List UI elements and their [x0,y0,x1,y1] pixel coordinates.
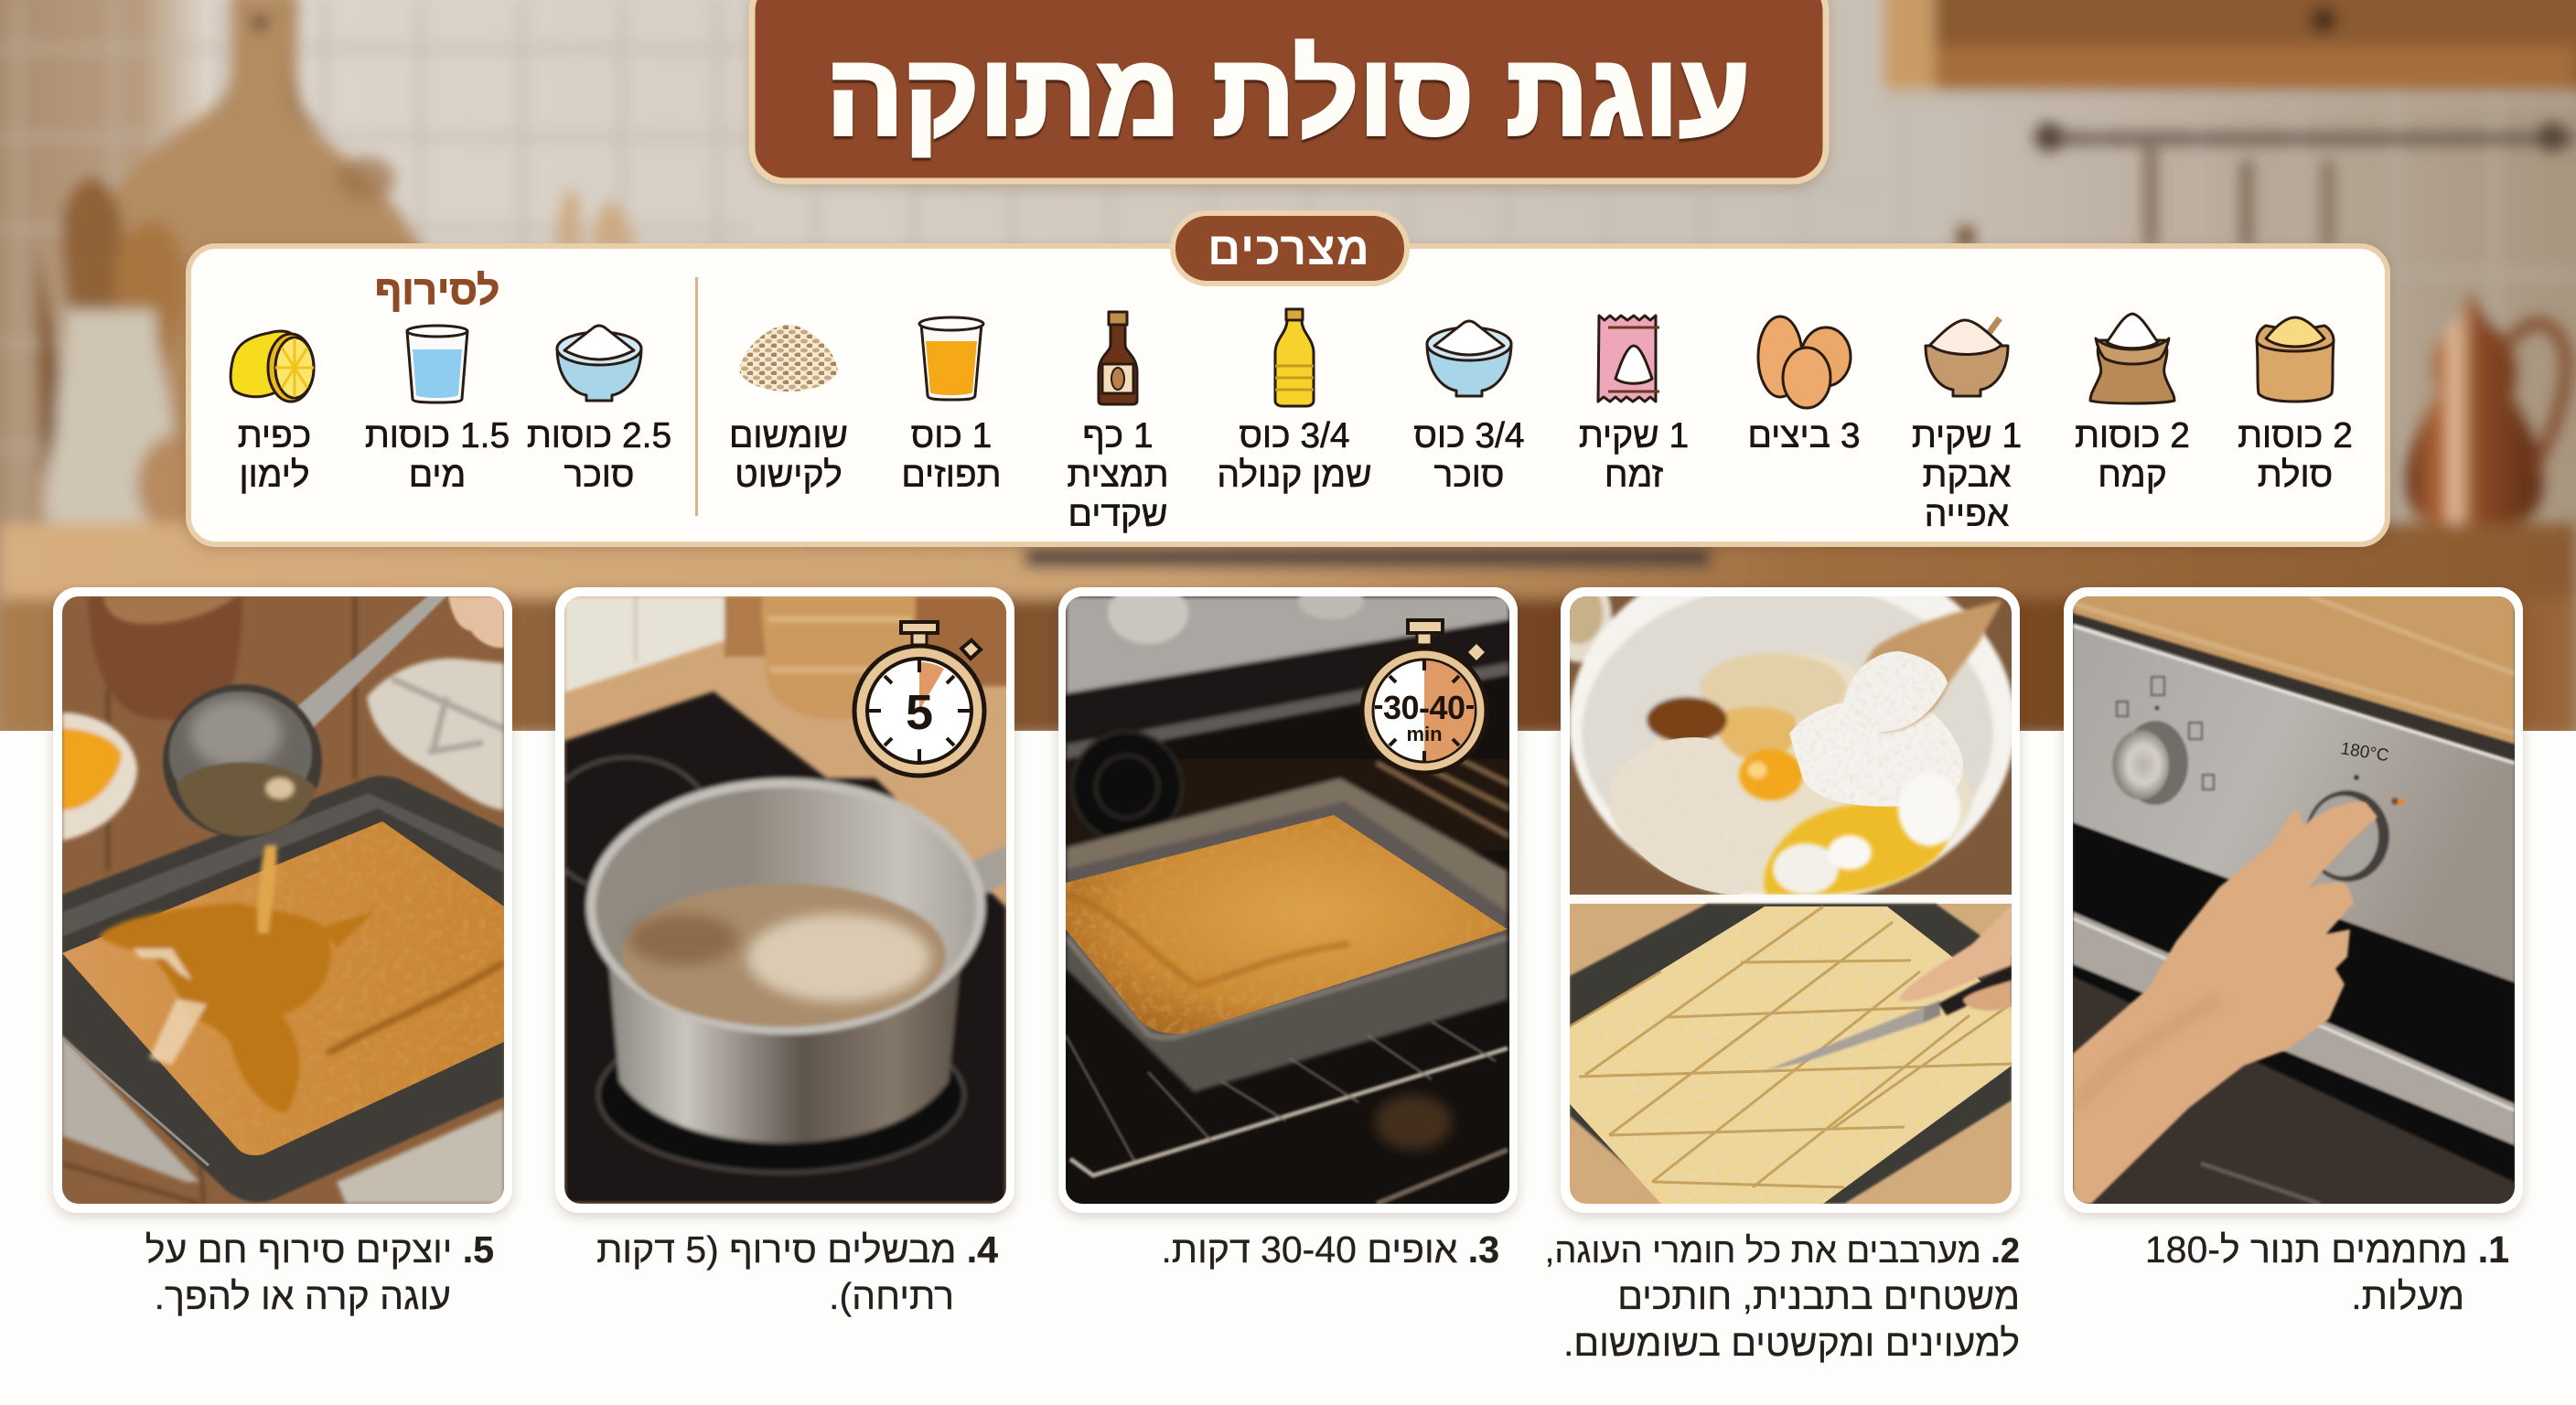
ingredient: almond extract [1067,312,1169,534]
ingredient: sugar: סוכר [1433,456,1505,495]
ladle [163,592,451,838]
ingredient: almond extract: 1 כף [1082,416,1154,456]
caption: step 5: 5. יוצקים סירוף חם על [145,1228,494,1271]
ingredients pill heading [1173,213,1407,284]
ingredient: syrup sugar: סוכר [564,456,635,495]
ingredient: water: מים [409,456,466,495]
ingredient: lemon [231,331,314,495]
step 3 card: baking in oven [1058,582,1518,1213]
icon: almond extract bottle [1099,312,1137,404]
ingredient: canola oil: 3/4 כוס [1239,416,1350,456]
ingredient: sesame: לקישוט [735,456,843,495]
icon: sesame pile [739,325,838,391]
ingredient: flour: קמח [2098,456,2167,495]
photo: hand turning oven knob [2073,595,2515,1204]
arm and hand [2073,802,2377,1204]
rail and hanging tools [2040,133,2576,145]
utensils [62,178,123,402]
caption: step 4: 4. מבשלים סירוף (5 דקות [596,1228,998,1271]
ingredient: semolina: סולת [2258,456,2333,495]
icon: three eggs [1758,316,1851,408]
icon: bowl of syrup sugar [557,326,641,401]
ingredient: water: 1.5 כוסות [365,416,510,456]
photo: syrup poured on cake [62,592,504,1204]
upper cabinet [1884,0,2576,90]
ingredient: orange juice: תפוזים [901,456,1002,495]
timer: 30-40 minutes: min [1406,723,1443,745]
copper pitcher [2404,287,2543,525]
photo: mixing bowl and scored dough [1570,596,2012,1204]
ingredient: lemon: כפית [238,416,311,456]
icon: oil bottle [1275,309,1314,406]
ingredient: yeast: 1 שקית [1579,416,1689,456]
caption: step 5: עוגה קרה או להפך. [155,1275,451,1317]
ingredient: sesame [729,325,848,495]
ingredient: baking powder [1912,318,2022,534]
photo: cake in the oven [1066,582,1509,1204]
cutting board [91,0,449,533]
ingredient: flour: 2 כוסות [2075,416,2190,456]
pan [62,776,504,1202]
ingredient: eggs: 3 ביצים [1747,416,1861,456]
ingredient: semolina: 2 כוסות [2238,416,2353,456]
ingredients pill heading: מצרכים [1208,223,1370,274]
icon: flour sack [2090,314,2174,403]
vase [44,310,185,557]
panel: ingredients [188,213,2388,544]
ingredient: syrup sugar [527,326,671,495]
ingredient: yeast [1579,316,1689,495]
caption: step 2: למעוינים ומקשטים בשומשום. [1563,1322,2020,1364]
caption: step 2 [1545,1232,2020,1364]
ingredient: orange juice [901,317,1002,495]
ingredient: water [365,326,510,495]
ingredient: baking powder: 1 שקית [1912,416,2022,456]
icon: glass of water [407,326,467,402]
ingredient: almond extract: תמצית [1067,456,1169,495]
ingredient: orange juice: 1 כוס [911,416,992,456]
syrup heading: לסירוף [375,268,499,313]
ingredient: flour [2075,314,2190,495]
ingredient: canola oil [1217,309,1372,495]
syrup divider [695,277,698,516]
caption: step 1: 1. מחממים תנור ל-180 [2145,1228,2509,1271]
icon: glass of juice [919,317,983,400]
caption: step 1 [2145,1228,2509,1317]
step 1 card: preheating oven [2064,587,2523,1213]
step 4 card: boiling syrup [544,587,1014,1213]
caption: step 4: רתיחה). [829,1275,954,1317]
ingredient: semolina [2238,317,2353,495]
ingredient: almond extract: שקדים [1068,495,1167,534]
step 2 card: mixing and cutting [1546,546,2020,1213]
caption: step 3: 3. אופים 30-40 דקות. [1161,1228,1499,1271]
counter and cabinets [0,523,2576,598]
icon: semolina canister [2257,317,2334,402]
ingredient: canola oil: שמן קנולה [1217,456,1372,495]
photo: hand turning oven knob: 180°C [2339,739,2390,766]
small wooden items [553,192,638,247]
step 5 card: pouring syrup [53,587,512,1213]
ingredient: sugar: 3/4 כוס [1413,416,1525,456]
timer: 30-40 minutes [1362,620,1487,773]
ingredient: lemon: לימון [239,456,310,495]
timer: 5 minutes: 5 [906,685,933,740]
title banner [752,0,1826,181]
ingredient: yeast: זמח [1605,456,1664,495]
caption: step 2: 2. מערבבים את כל חומרי העוגה, [1545,1232,2020,1271]
ingredient: syrup sugar: 2.5 כוסות [527,416,671,456]
icon: bowl of baking powder with spoon [1926,318,2008,396]
caption: step 4 [596,1228,998,1317]
icon: yeast sachet [1598,316,1659,402]
ingredient: baking powder: אבקת [1923,456,2011,495]
caption: step 2: משטחים בתבנית, חותכים [1617,1275,2020,1317]
title: עוגת סולת מתוקה [826,30,1750,159]
ingredient: eggs [1747,316,1861,456]
ingredient: sugar [1413,321,1525,495]
timer: 5 minutes [854,622,984,776]
icon: lemon and slice [231,331,314,402]
ingredient: baking powder: אפייה [1925,495,2009,534]
photo: pot on cooktop [544,596,1013,1204]
caption: step 5 [145,1228,494,1317]
caption: step 1: מעלות. [2351,1275,2464,1317]
timer: 30-40 minutes: 30-40 [1383,689,1465,726]
icon: bowl of sugar [1427,321,1511,396]
ingredient: sesame: שומשום [729,416,848,456]
